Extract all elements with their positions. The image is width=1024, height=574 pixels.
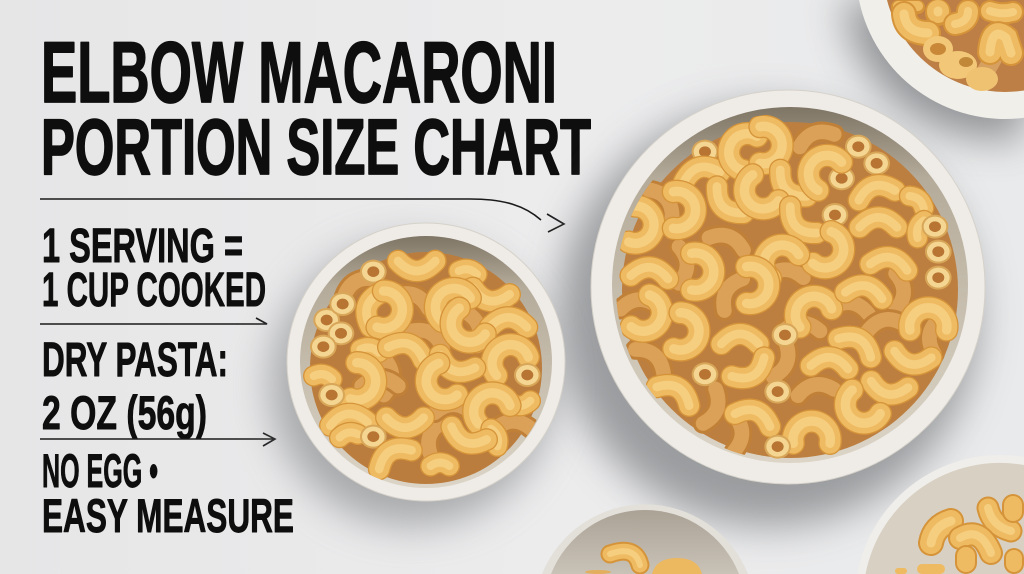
shadow of large bowl bbox=[558, 106, 978, 526]
text: dry pasta amount bbox=[42, 334, 228, 439]
bottom center macaroni bbox=[585, 551, 702, 574]
bowl: small with macaroni bbox=[287, 223, 565, 501]
title: PORTION SIZE CHART bbox=[41, 102, 591, 191]
text: no egg, easy measure: NO EGG • bbox=[42, 444, 158, 497]
top right bowl pasta bed bbox=[887, 0, 1024, 92]
small bowl rim bbox=[287, 223, 565, 501]
small bowl macaroni pieces bbox=[310, 260, 541, 469]
bowl: large with macaroni bbox=[591, 90, 985, 484]
bowl: bottom center partial bbox=[542, 504, 748, 574]
text: serving size bbox=[42, 220, 266, 317]
top right bowl shadow bbox=[843, 0, 1024, 139]
title: ELBOW MACARONI bbox=[41, 25, 557, 121]
text: dry pasta amount: DRY PASTA: bbox=[42, 334, 228, 387]
arrow: under dry pasta bbox=[40, 433, 275, 446]
title bbox=[41, 25, 591, 191]
text: no egg, easy measure bbox=[42, 444, 294, 542]
bottom right macaroni bbox=[898, 505, 1014, 571]
small bowl pasta bed bbox=[310, 252, 542, 484]
arrow: curved from title to large bowl bbox=[40, 199, 564, 232]
large bowl pasta bed bbox=[622, 122, 958, 458]
large bowl rim bbox=[591, 90, 985, 484]
bottom center bowl inner wall bbox=[551, 510, 739, 574]
text: no egg, easy measure: EASY MEASURE bbox=[42, 489, 294, 542]
top right macaroni bbox=[898, 6, 1013, 91]
text: serving size: 1 CUP COOKED bbox=[42, 264, 266, 317]
shadow of small bowl bbox=[270, 242, 554, 526]
bottom right bowl inner wall bbox=[866, 463, 1024, 574]
text: serving size: 1 SERVING = bbox=[42, 220, 243, 273]
text: dry pasta amount: 2 OZ (56g) bbox=[42, 386, 207, 439]
large bowl macaroni pieces bbox=[620, 126, 952, 459]
bottom center bowl rim bbox=[542, 504, 748, 574]
bottom right bowl rim bbox=[857, 455, 1024, 574]
large bowl inner wall bbox=[612, 107, 968, 463]
small bowl inner wall bbox=[300, 236, 552, 488]
bowl: bottom right partial bbox=[857, 455, 1024, 574]
bowl: top right partial bbox=[843, 0, 1024, 139]
arrow: under serving size bbox=[40, 318, 267, 324]
top right bowl rim bbox=[859, 0, 1024, 119]
